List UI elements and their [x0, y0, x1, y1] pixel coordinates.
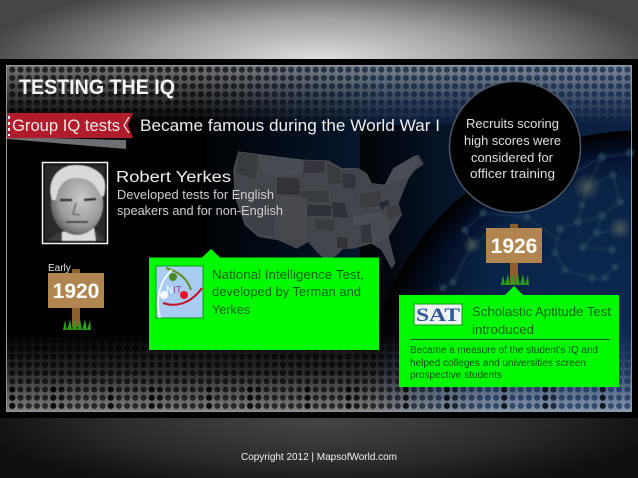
- ribbon: Group IQ tests: Group IQ tests: [12, 117, 120, 135]
- dark dot columns: [6, 384, 632, 412]
- circle callout: officer training: [470, 167, 555, 181]
- green box: National Intelligence Test: Yerkes: [212, 303, 250, 317]
- subheading: Became famous during the World War I: [140, 117, 440, 135]
- green box: National Intelligence Test: National Intelligence Test,: [212, 268, 364, 282]
- circle callout: considered for: [471, 151, 553, 165]
- icon: NIT logo: [156, 266, 203, 318]
- US map: [233, 152, 423, 268]
- network constellation: [440, 150, 634, 291]
- green box: SAT: helped colleges and universities screen: [410, 358, 586, 369]
- green box: SAT: introduced: [472, 323, 534, 337]
- ribbon: Group IQ tests: [7, 113, 133, 149]
- icon: NIT logo: N: [166, 285, 173, 296]
- copyright footer: Copyright 2012 | MapsofWorld.com: [241, 451, 397, 463]
- Robert Yerkes text: Developed tests for English: [117, 188, 274, 202]
- portrait of Robert Yerkes: [42, 162, 108, 244]
- panel border: [6, 66, 632, 412]
- dot grid top: [6, 65, 632, 125]
- circle callout: [450, 82, 580, 212]
- dot grid bottom: [7, 340, 631, 411]
- signpost 1926: [486, 224, 542, 285]
- green box: SAT: Scholastic Aptitude Test: [472, 305, 612, 319]
- green box: SAT: prospective students: [410, 370, 502, 381]
- signpost 1926: 1926: [491, 235, 537, 258]
- signpost 1920: [48, 263, 104, 330]
- icon: SAT logo: SAT: [416, 305, 460, 326]
- Robert Yerkes text: Robert Yerkes: [116, 169, 231, 186]
- main panel background: [6, 65, 634, 412]
- signpost 1920: 1920: [53, 280, 99, 303]
- Robert Yerkes text: speakers and for non-English: [117, 204, 283, 218]
- signpost 1920: Early: [48, 263, 71, 274]
- title: TESTING THE IQ: [19, 76, 175, 99]
- green box: SAT: [399, 286, 619, 387]
- icon: NIT logo: IT: [173, 285, 182, 296]
- circle callout: high scores were: [464, 134, 561, 148]
- green box: SAT: Became a measure of the student's IQ and: [410, 345, 598, 356]
- circle callout: Recruits scoring: [466, 117, 559, 131]
- Robert Yerkes text: [116, 169, 283, 218]
- green box: National Intelligence Test: [149, 249, 379, 350]
- green box: National Intelligence Test: developed by Terman and: [212, 285, 361, 299]
